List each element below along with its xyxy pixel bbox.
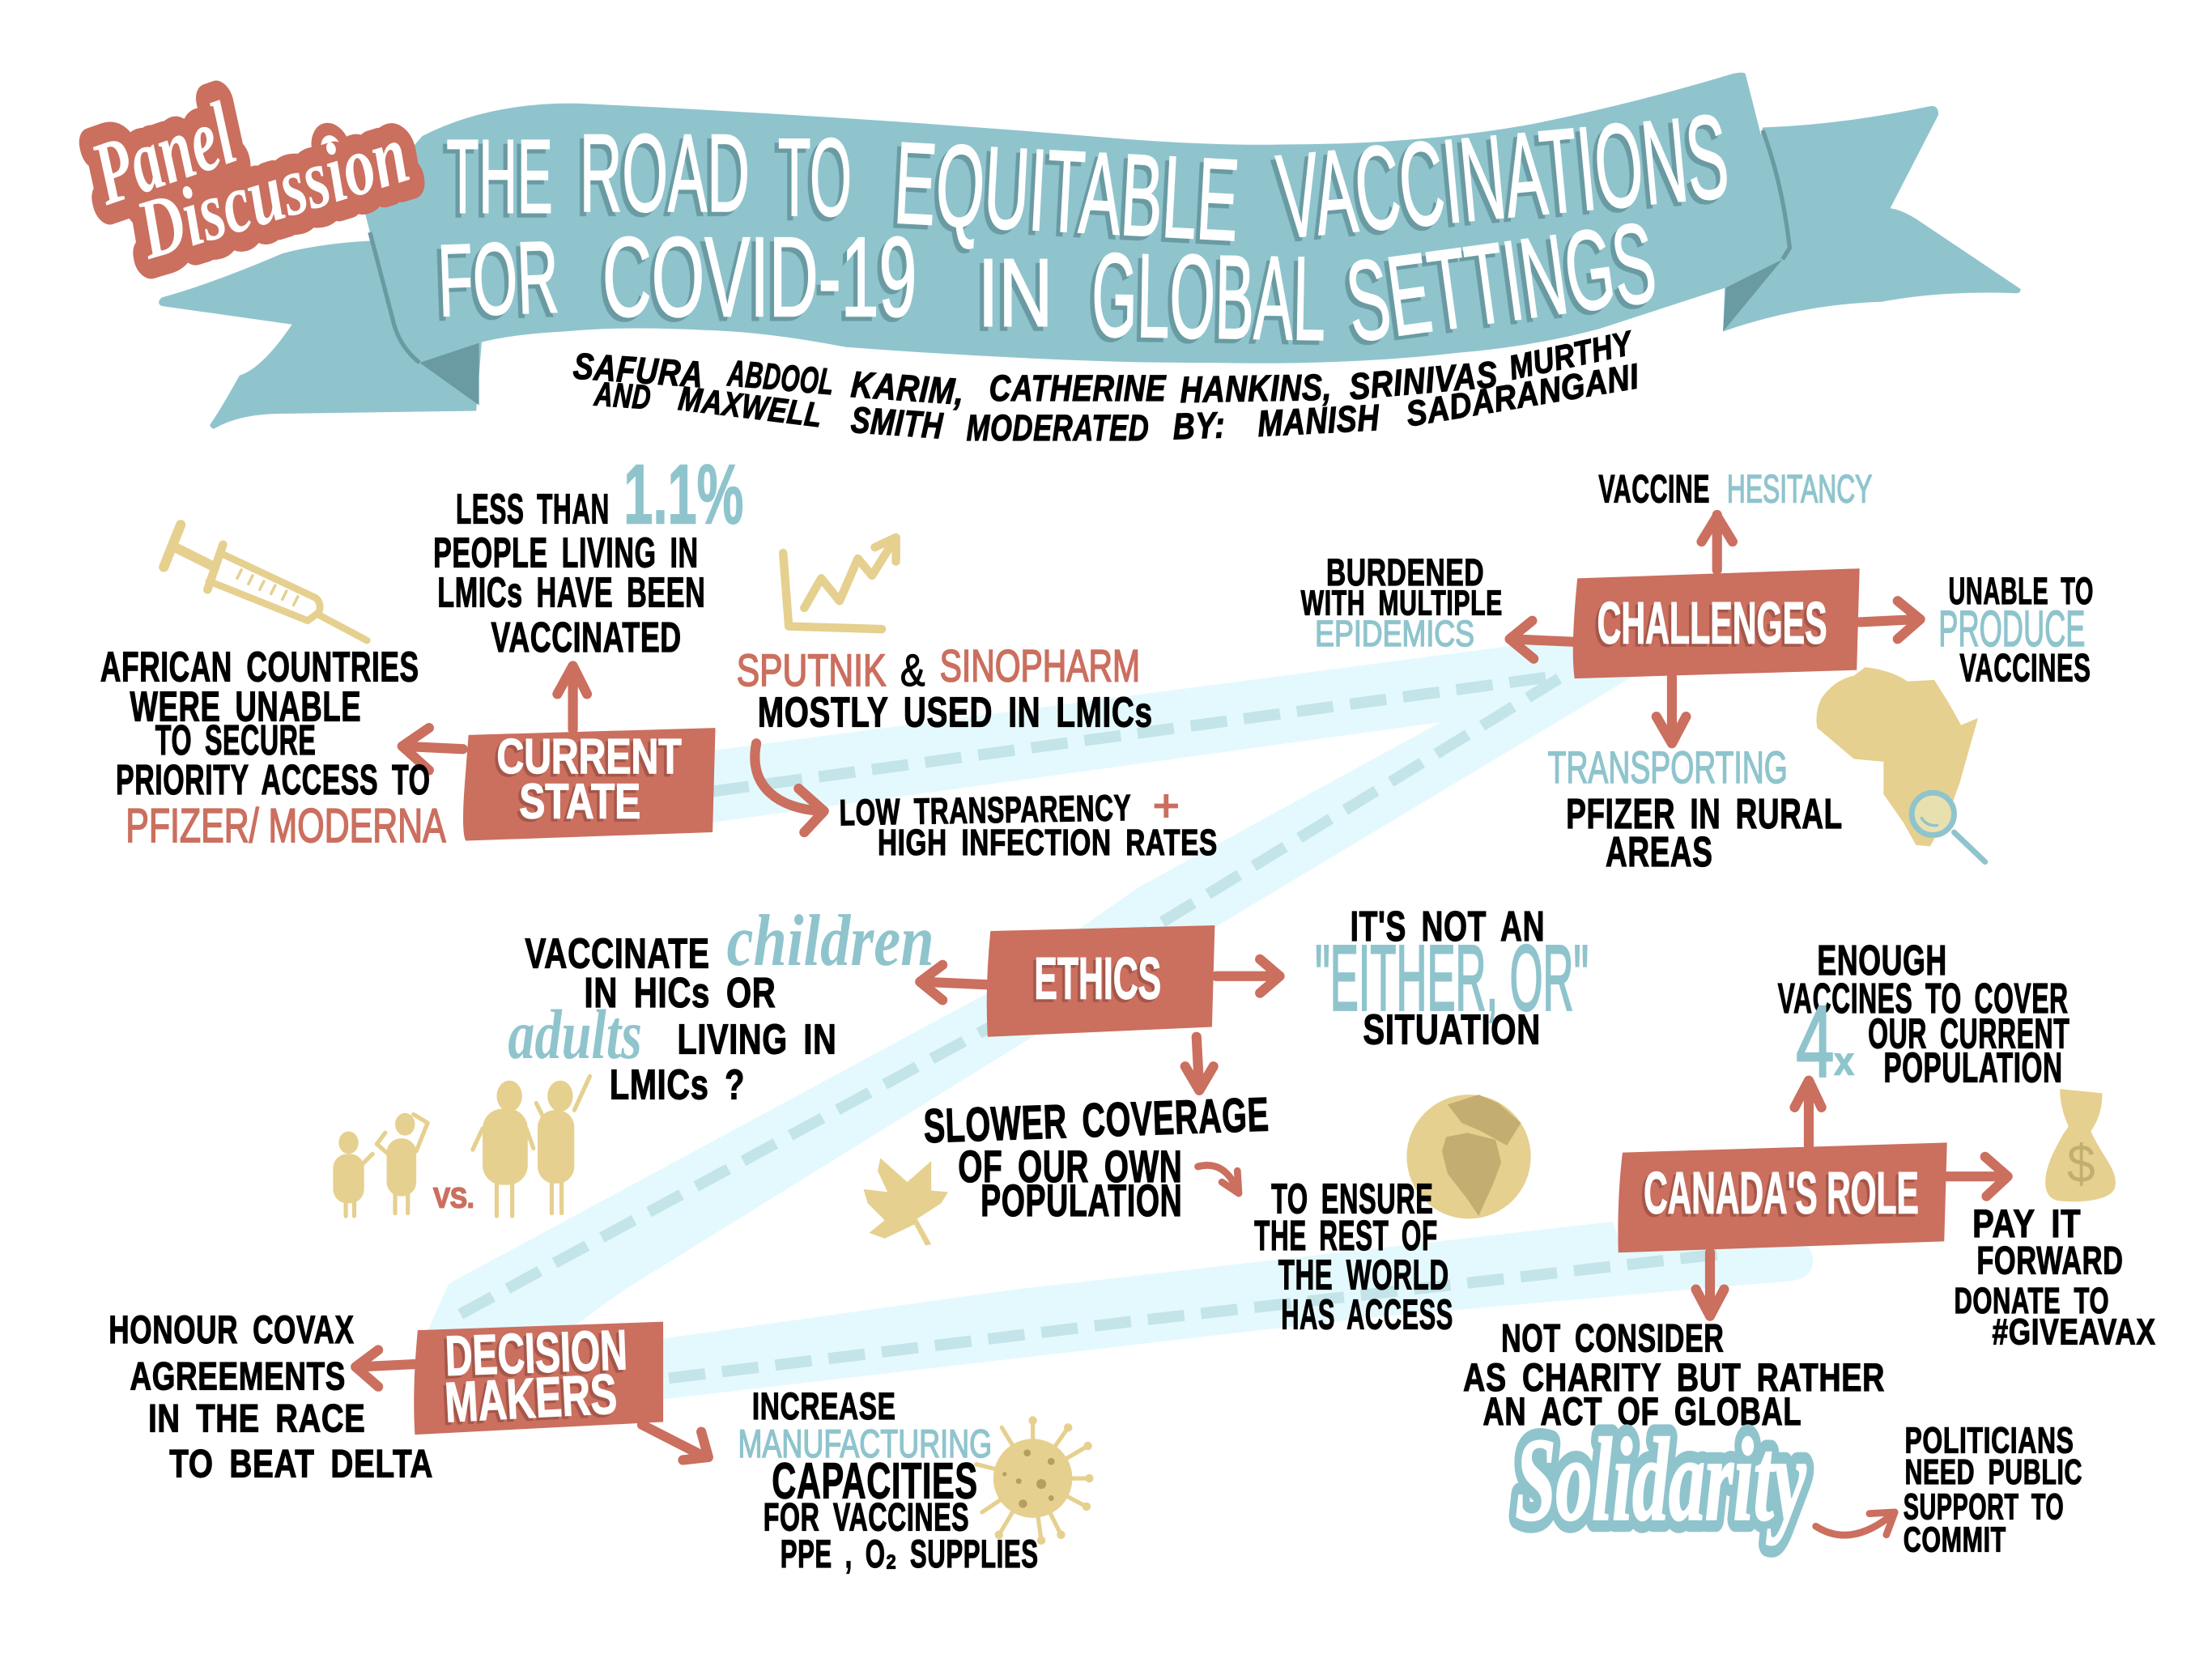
text: sputnik and sinopharm: SPUTNIK xyxy=(737,644,886,695)
box label: DECISION xyxy=(445,1320,628,1388)
text: vaccinate children or adults: VACCINATE xyxy=(525,931,710,978)
box label: STATE xyxy=(519,775,640,830)
text: either or: SITUATION xyxy=(1363,1007,1541,1054)
text: 1.1 percent vaccinated: 1.1% xyxy=(623,447,743,542)
right ribbon tail xyxy=(1723,106,2021,331)
box label: CHALLENGES xyxy=(1597,589,1827,656)
text: rest of world: THE WORLD xyxy=(1278,1252,1449,1299)
title: GLOBAL xyxy=(1091,228,1327,365)
text: politicians: COMMIT xyxy=(1904,1520,2006,1560)
text: vaccine hesitancy: HESITANCY xyxy=(1727,467,1873,511)
arrow: down xyxy=(1657,677,1686,743)
box: ethics xyxy=(987,925,1214,1037)
text: transporting pfizer: PFIZER IN RURAL xyxy=(1566,792,1843,838)
text: increase manufacturing: CAPACITIES xyxy=(772,1452,978,1509)
ribbon right edge line xyxy=(1763,130,1789,259)
panel discussion sticker xyxy=(79,83,419,277)
text: african countries: WERE UNABLE xyxy=(130,684,361,731)
ribbon left edge line xyxy=(370,232,419,363)
text: not charity: NOT CONSIDER xyxy=(1501,1316,1724,1360)
text: vaccinate children or adults: IN HICs OR xyxy=(585,971,776,1017)
box label xyxy=(496,729,682,830)
text: increase manufacturing: INCREASE xyxy=(752,1385,896,1427)
text: vaccinate children or adults: children xyxy=(727,901,934,982)
panel: challenges xyxy=(1301,467,2094,876)
text: transporting pfizer xyxy=(1548,742,1843,876)
text: slower coverage: POPULATION xyxy=(981,1175,1182,1226)
text: increase manufacturing: MANUFACTURING xyxy=(738,1422,992,1465)
left fold shadow xyxy=(419,342,479,405)
text: slower coverage: SLOWER COVERAGE xyxy=(923,1088,1270,1154)
child two xyxy=(376,1113,428,1214)
text: african countries: AFRICAN COUNTRIES xyxy=(100,644,419,691)
text: honour covax xyxy=(108,1307,433,1486)
arrow: left xyxy=(355,1350,416,1387)
title: THE xyxy=(446,117,553,235)
text: not charity: AS CHARITY BUT RATHER xyxy=(1463,1355,1885,1400)
diagram of discussion panels: "EITHER, OR" xyxy=(1315,925,1589,1030)
text: 1.1 percent vaccinated xyxy=(433,447,743,661)
panelists subtitle: MANISH xyxy=(1257,396,1381,444)
text: sputnik and sinopharm: SINOPHARM xyxy=(940,640,1140,691)
icon: virus xyxy=(976,1416,1094,1545)
panelists subtitle: ABDOOL xyxy=(725,351,836,403)
text: 1.1 percent vaccinated: PEOPLE LIVING IN xyxy=(433,530,699,577)
title: COVID-19 xyxy=(602,214,917,340)
arrow: right xyxy=(1947,1157,2008,1197)
text: enough vaccines: OUR CURRENT xyxy=(1868,1011,2069,1058)
sticker outline: Solidarity xyxy=(1516,1415,1806,1546)
text: rest of world: THE REST OF xyxy=(1254,1214,1438,1260)
solidarity sticker xyxy=(1516,1415,1806,1546)
text: transporting pfizer: TRANSPORTING xyxy=(1548,742,1788,793)
arrow: left xyxy=(920,965,988,1000)
text: low transparency: + xyxy=(1153,780,1180,831)
panelists subtitle: MAXWELL xyxy=(676,380,824,436)
sticker outline: Discussion xyxy=(126,107,419,277)
text: vaccinate children or adults: LMICs ? xyxy=(610,1062,745,1109)
text: african countries xyxy=(100,644,446,853)
title: IN xyxy=(978,240,1053,347)
panelists subtitle: SMITH xyxy=(849,398,946,447)
text: multiple epidemics: BURDENED xyxy=(1326,551,1484,594)
panelists subtitle: SAFURA xyxy=(572,344,705,396)
icon: money bag: $ xyxy=(2067,1136,2095,1195)
text: 1.1 percent vaccinated: LESS THAN xyxy=(456,487,610,534)
icon: maple leaf xyxy=(864,1158,948,1246)
text: african countries: PFIZER/ MODERNA xyxy=(125,800,446,853)
panelists subtitle: BY: xyxy=(1172,403,1226,448)
text: multiple epidemics: EPIDEMICS xyxy=(1315,612,1474,654)
text: pay it forward: #GIVEAVAX xyxy=(1992,1311,2156,1353)
text: not charity xyxy=(1463,1316,1885,1433)
title: FOR xyxy=(436,221,560,338)
icon: rising chart xyxy=(783,538,896,629)
title xyxy=(436,89,1733,365)
text: politicians xyxy=(1904,1419,2082,1560)
sticker lettering xyxy=(79,83,419,277)
arrow: right xyxy=(1860,601,1921,639)
text: multiple epidemics xyxy=(1301,551,1503,654)
box: challenges xyxy=(1573,568,1860,678)
text: slower coverage xyxy=(923,1088,1270,1226)
text: rest of world: TO ENSURE xyxy=(1271,1176,1433,1223)
arrow: down right xyxy=(642,1425,708,1460)
text: unable to produce: UNABLE TO xyxy=(1948,570,2094,612)
text: enough vaccines: ENOUGH xyxy=(1817,938,1947,984)
box: canada's role xyxy=(1618,1142,1947,1252)
panelists subtitle: MURTHY xyxy=(1506,325,1637,388)
icon: syringe xyxy=(164,525,367,640)
title banner ribbon xyxy=(159,73,2021,429)
text: politicians: NEED PUBLIC xyxy=(1904,1453,2082,1493)
panelists subtitle: SRINIVAS xyxy=(1347,353,1499,408)
panelists subtitle: MODERATED xyxy=(967,406,1149,449)
panel: canada's role xyxy=(1463,938,2156,1560)
icon: globe xyxy=(1406,1095,1531,1218)
title: EQUITABLE xyxy=(891,119,1242,266)
text: sputnik and sinopharm: MOSTLY USED IN LMICs xyxy=(758,690,1153,737)
text: honour covax: AGREEMENTS xyxy=(130,1354,346,1398)
arrow: down xyxy=(1185,1037,1214,1090)
text: honour covax: HONOUR COVAX xyxy=(108,1307,354,1351)
title: TO xyxy=(778,115,852,240)
text: pay it forward: PAY IT xyxy=(1972,1202,2081,1246)
text: unable to produce: PRODUCE xyxy=(1938,600,2085,657)
right fold shadow xyxy=(1723,259,1783,331)
panelists subtitle: KARIM, xyxy=(849,363,966,413)
text: vaccine hesitancy: VACCINE xyxy=(1598,467,1710,511)
box label xyxy=(444,1320,628,1435)
sticker lettering: Solidarity xyxy=(1516,1415,1806,1546)
arrow: up xyxy=(1795,1081,1822,1146)
text: african countries: TO SECURE xyxy=(155,718,316,764)
text: vaccinate children or adults: adults xyxy=(508,994,642,1073)
panelists subtitle: HANKINS, xyxy=(1180,366,1332,410)
arrow: up xyxy=(1702,515,1733,570)
text: honour covax: IN THE RACE xyxy=(148,1397,365,1440)
text: low transparency xyxy=(839,780,1218,863)
panelists subtitle: CATHERINE xyxy=(989,367,1167,410)
text: not charity: AN ACT OF GLOBAL xyxy=(1482,1389,1802,1433)
text: transporting pfizer: AREAS xyxy=(1606,830,1712,876)
arrow: down xyxy=(1696,1252,1724,1316)
text: enough vaccines: x xyxy=(1834,1039,1854,1083)
adult two xyxy=(536,1076,589,1214)
sticker lettering: Discussion xyxy=(126,107,419,277)
text: vaccinate children or adults xyxy=(508,901,934,1109)
panelists subtitle: AND xyxy=(592,376,653,418)
text: vaccinate children or adults: LIVING IN xyxy=(678,1017,836,1064)
text: rest of world xyxy=(1254,1176,1453,1339)
text: increase manufacturing xyxy=(738,1385,1039,1575)
text: pay it forward: FORWARD xyxy=(1976,1239,2124,1282)
sticker outline xyxy=(79,83,419,277)
diagram of discussion panels xyxy=(100,447,2156,1575)
title: SETTINGS xyxy=(1339,199,1662,365)
child one xyxy=(333,1131,372,1216)
text: either or xyxy=(1315,904,1589,1054)
box label: MAKERS xyxy=(444,1363,619,1435)
text: increase manufacturing: PPE , O₂ SUPPLIES xyxy=(781,1532,1039,1575)
main ribbon xyxy=(363,73,1789,363)
text: increase manufacturing: FOR VACCINES xyxy=(764,1495,969,1539)
arrow: left xyxy=(402,728,463,770)
icon: magnifier xyxy=(1912,793,1985,862)
text: either or: IT'S NOT AN xyxy=(1351,904,1545,950)
left ribbon tail xyxy=(159,240,482,429)
title: VACCINATIONS xyxy=(1273,89,1733,263)
arrow: curved to transparency xyxy=(755,743,824,832)
adult one xyxy=(473,1081,534,1216)
arrow: right xyxy=(1216,959,1280,993)
text: 1.1 percent vaccinated: LMICs HAVE BEEN xyxy=(437,570,705,616)
text: low transparency: LOW TRANSPARENCY xyxy=(839,786,1132,834)
text: sputnik and sinopharm xyxy=(737,640,1153,737)
label: vs: VS. xyxy=(433,1184,474,1214)
arrow: coverage to access xyxy=(1197,1165,1239,1193)
box: decision makers xyxy=(414,1322,663,1435)
text: 1.1 percent vaccinated: VACCINATED xyxy=(491,615,682,661)
connecting road between panels xyxy=(423,638,1813,1400)
arrow: up xyxy=(557,665,587,729)
text: vaccine hesitancy xyxy=(1598,467,1873,511)
sticker lettering: Panel xyxy=(79,83,247,224)
box label: CURRENT xyxy=(496,729,682,784)
icon: money bag xyxy=(2045,1089,2116,1201)
text: pay it forward xyxy=(1954,1202,2156,1353)
text: unable to produce xyxy=(1938,570,2094,690)
text: multiple epidemics: WITH MULTIPLE xyxy=(1301,584,1503,623)
icon: africa xyxy=(1816,667,1978,846)
text: honour covax: TO BEAT DELTA xyxy=(169,1442,433,1486)
arrow: solidarity to politicians xyxy=(1816,1512,1895,1535)
panel: current state xyxy=(100,447,1218,863)
text: unable to produce: VACCINES xyxy=(1959,646,2091,690)
text: african countries: PRIORITY ACCESS TO xyxy=(116,758,431,804)
text: pay it forward: DONATE TO xyxy=(1954,1279,2109,1322)
text: enough vaccines xyxy=(1778,938,2069,1099)
box label: CANADA'S ROLE xyxy=(1644,1159,1919,1226)
icon: children vs adults xyxy=(333,1076,589,1216)
panel: decision makers xyxy=(108,1307,1094,1575)
text: low transparency: HIGH INFECTION RATES xyxy=(878,821,1218,863)
sticker outline: Panel xyxy=(79,83,247,224)
text: politicians: POLITICIANS xyxy=(1904,1419,2074,1461)
text: enough vaccines: POPULATION xyxy=(1883,1045,2063,1092)
panelists subtitle xyxy=(572,325,1643,449)
arrow: left xyxy=(1510,621,1575,659)
panel: ethics xyxy=(333,901,1589,1339)
text: slower coverage: OF OUR OWN xyxy=(958,1141,1182,1192)
title: ROAD xyxy=(580,110,750,235)
text: enough vaccines: 4 xyxy=(1796,986,1834,1099)
panelists subtitle: SADARANGANI xyxy=(1403,357,1643,435)
text: sputnik and sinopharm: & xyxy=(900,644,925,695)
box: current state xyxy=(463,728,716,841)
text: rest of world: HAS ACCESS xyxy=(1281,1292,1453,1339)
box label: ETHICS xyxy=(1034,945,1161,1011)
text: politicians: SUPPORT TO xyxy=(1904,1486,2064,1528)
